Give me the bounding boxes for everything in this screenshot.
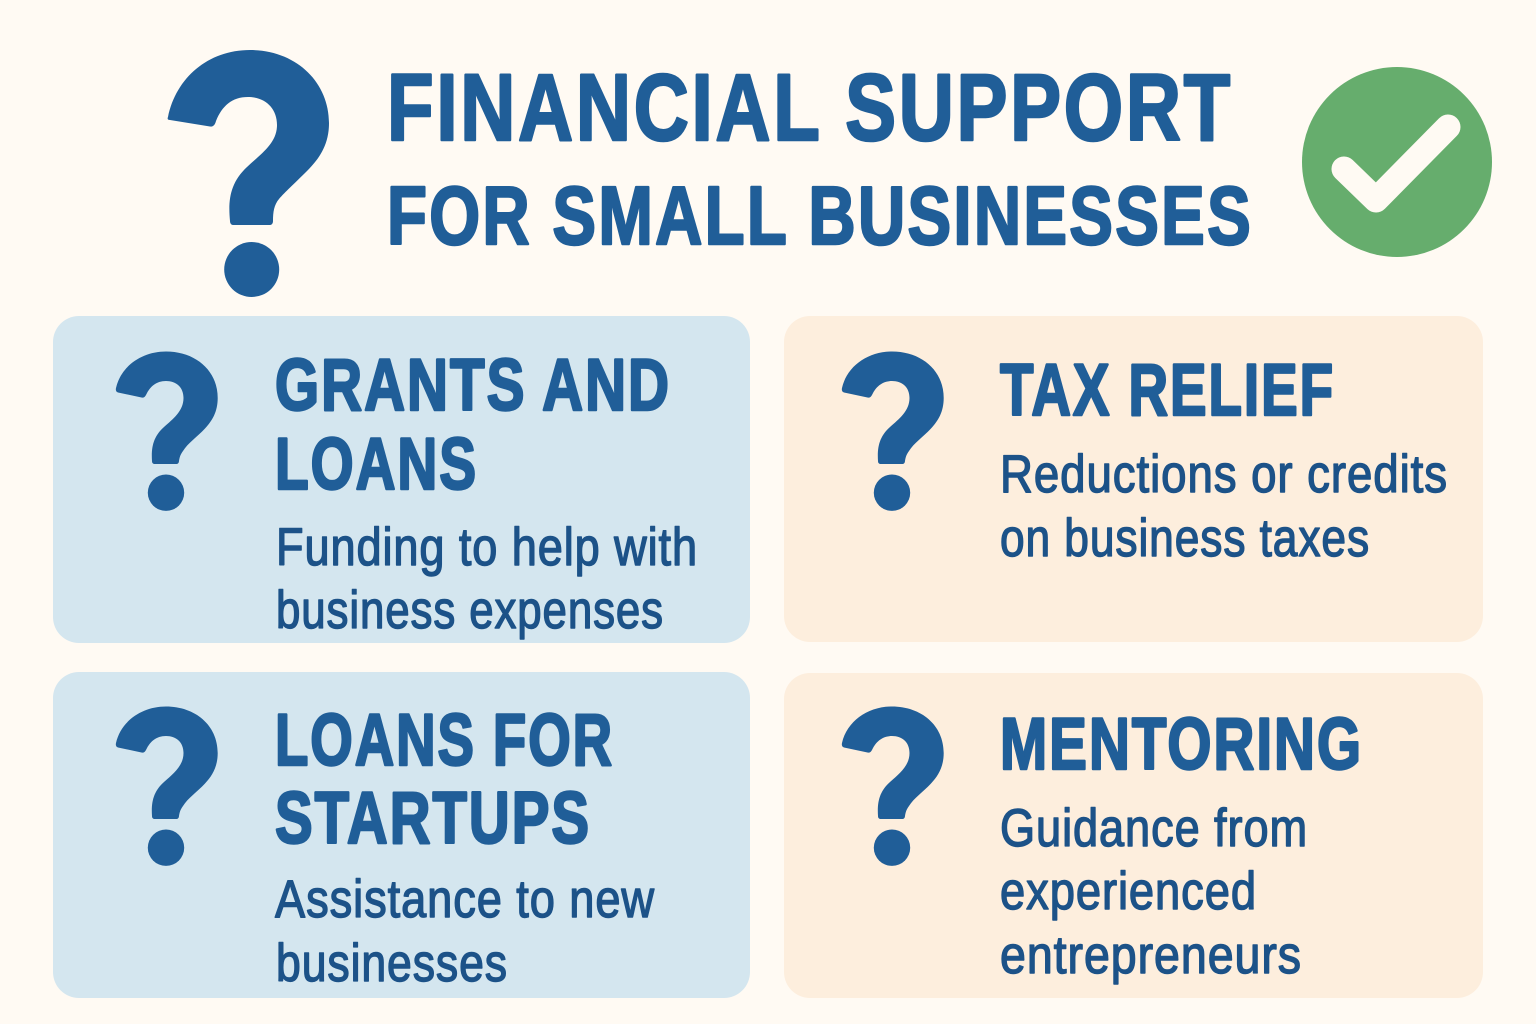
description: loans for startups: Assistance to new <box>275 870 655 929</box>
description: grants and loans: Funding to help with <box>276 518 698 577</box>
description: loans for startups <box>275 870 655 993</box>
panel: grants and loans <box>53 316 750 643</box>
title <box>387 55 1253 262</box>
heading: mentoring: MENTORING <box>1000 704 1363 785</box>
description: mentoring: entrepreneurs <box>1000 926 1302 985</box>
description: tax relief: Reductions or credits <box>1000 445 1448 504</box>
panel: mentoring <box>784 673 1483 998</box>
icon: question mark <box>842 706 944 866</box>
description: loans for startups: businesses <box>276 934 508 993</box>
icon: question mark <box>842 352 944 511</box>
heading: loans for startups: STARTUPS <box>275 778 591 859</box>
icon: large question mark <box>168 50 329 297</box>
panel: tax relief <box>784 316 1483 642</box>
description: grants and loans <box>276 518 698 640</box>
heading: grants and loans: LOANS <box>275 424 478 505</box>
title: FINANCIAL SUPPORT <box>387 55 1233 161</box>
title: FOR SMALL BUSINESSES <box>387 169 1253 262</box>
icon: question mark <box>116 706 218 866</box>
description: tax relief <box>1000 445 1448 568</box>
description: mentoring <box>1000 799 1308 985</box>
heading: tax relief: TAX RELIEF <box>1000 350 1335 431</box>
heading: grants and loans <box>275 345 671 505</box>
description: tax relief: on business taxes <box>1000 509 1370 568</box>
description: mentoring: Guidance from <box>1000 799 1308 858</box>
panel: loans for startups <box>53 672 750 998</box>
description: grants and loans: business expenses <box>276 581 664 640</box>
heading: loans for startups: LOANS FOR <box>275 700 614 781</box>
description: mentoring: experienced <box>1000 862 1257 921</box>
heading: grants and loans: GRANTS AND <box>275 345 671 426</box>
heading: loans for startups <box>275 700 614 859</box>
icon: question mark <box>116 352 218 511</box>
icon: green check mark <box>1302 67 1492 257</box>
